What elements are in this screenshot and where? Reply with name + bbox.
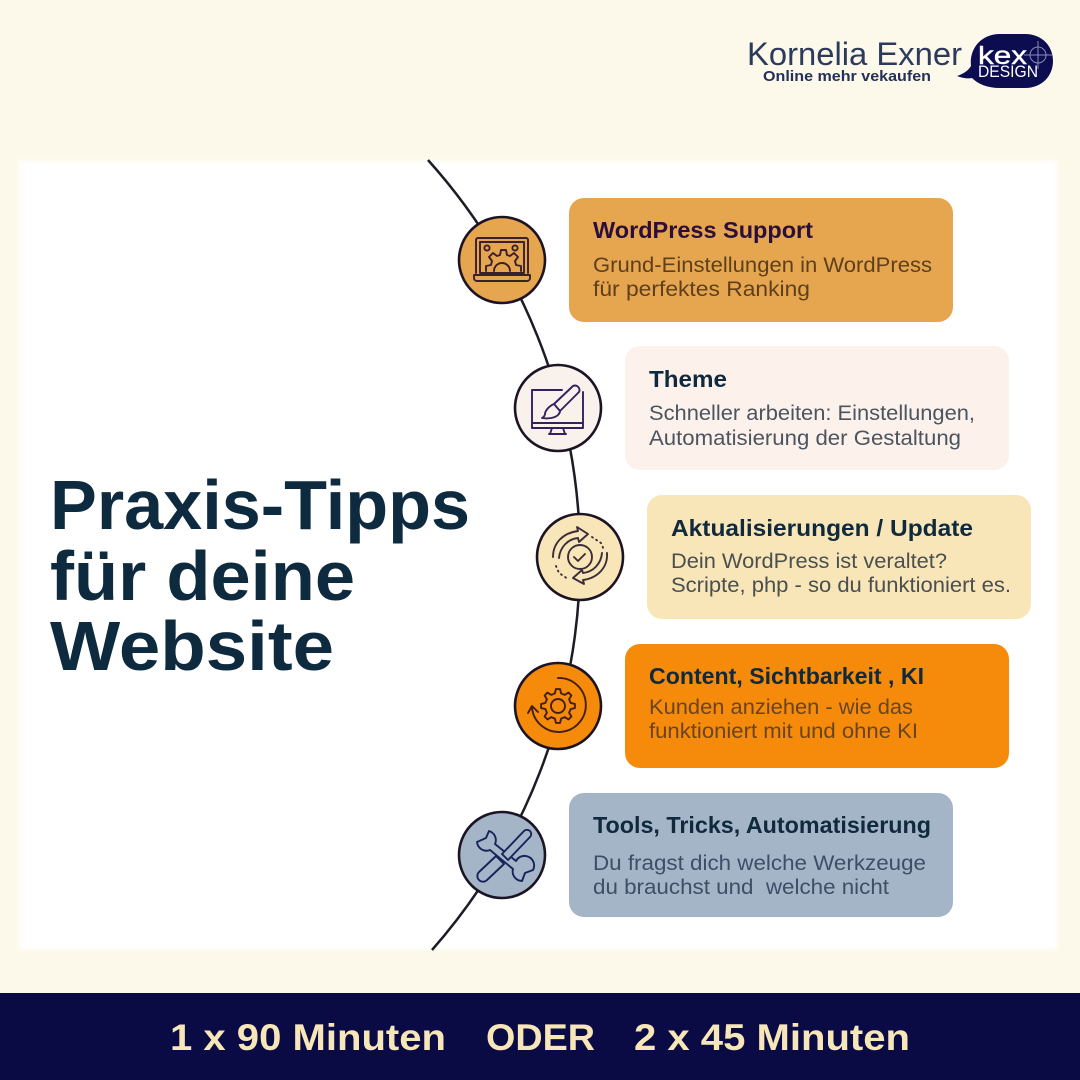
title	[50, 466, 470, 685]
card: Theme: Theme	[649, 366, 727, 392]
logo name: Kornelia Exner	[747, 36, 962, 72]
icon: gear with circular arrow	[515, 663, 601, 749]
card: Aktualisierungen / Update: Scripte, php - so du funktioniert es.	[671, 574, 1011, 597]
card: WordPress Support: für perfektes Ranking	[593, 278, 810, 301]
card: Content, Sichtbarkeit, KI: Kunden anziehen - wie das	[649, 696, 913, 719]
step 3: Aktualisierungen / Update	[537, 495, 1031, 619]
card: Theme: Schneller arbeiten: Einstellungen,	[649, 402, 975, 425]
title: Praxis-Tipps	[50, 466, 470, 544]
logo: Kornelia Exner kex design	[747, 34, 1053, 88]
logo speech bubble	[957, 34, 1053, 88]
card: Content, Sichtbarkeit, KI: Content, Sichtbarkeit , KI	[649, 663, 924, 689]
logo tagline: Online mehr vekaufen	[763, 68, 931, 85]
card: Tools, Tricks, Automatisierung: Tools, Tricks, Automatisierung	[593, 812, 931, 838]
card: Content, Sichtbarkeit, KI: funktioniert mit und ohne KI	[649, 720, 918, 743]
card: Theme: Automatisierung der Gestaltung	[649, 427, 961, 450]
step 2: Theme	[515, 346, 1009, 470]
card: Aktualisierungen / Update: Dein WordPress ist veraltet?	[671, 550, 947, 573]
icon: monitor with paintbrush	[515, 365, 601, 451]
card: WordPress Support	[569, 198, 953, 322]
title: für deine	[50, 537, 355, 615]
step 5: Tools, Tricks, Automatisierung	[459, 793, 953, 917]
card: WordPress Support: WordPress Support	[593, 217, 813, 243]
step 1: WordPress Support	[459, 198, 953, 322]
icon: laptop with gear	[459, 217, 545, 303]
logo kex: kex	[978, 42, 1028, 70]
footer oder: ODER	[486, 1017, 595, 1058]
card: Tools, Tricks, Automatisierung: du brauchst und welche nicht	[593, 876, 889, 899]
card: Tools, Tricks, Automatisierung	[569, 793, 953, 917]
footer band	[0, 993, 1080, 1080]
title: Website	[50, 607, 334, 685]
card: Content, Sichtbarkeit, KI	[625, 644, 1009, 768]
card: WordPress Support: Grund-Einstellungen in WordPress	[593, 254, 932, 277]
card: Aktualisierungen / Update	[647, 495, 1031, 619]
logo crosshair	[1024, 41, 1052, 69]
card: Theme	[625, 346, 1009, 470]
footer option one: 1 x 90 Minuten	[170, 1017, 446, 1058]
panel: white content area	[19, 161, 1057, 949]
timeline curve	[428, 160, 580, 950]
step 4: Content, Sichtbarkeit, KI	[515, 644, 1009, 768]
footer option two: 2 x 45 Minuten	[634, 1017, 910, 1058]
card: Aktualisierungen / Update: Aktualisierungen / Update	[671, 515, 973, 541]
icon: refresh arrows with check	[537, 514, 623, 600]
icon: crossed wrench and screwdriver	[459, 812, 545, 898]
card: Tools, Tricks, Automatisierung: Du fragst dich welche Werkzeuge	[593, 852, 926, 875]
logo design: DESIGN	[978, 62, 1038, 81]
